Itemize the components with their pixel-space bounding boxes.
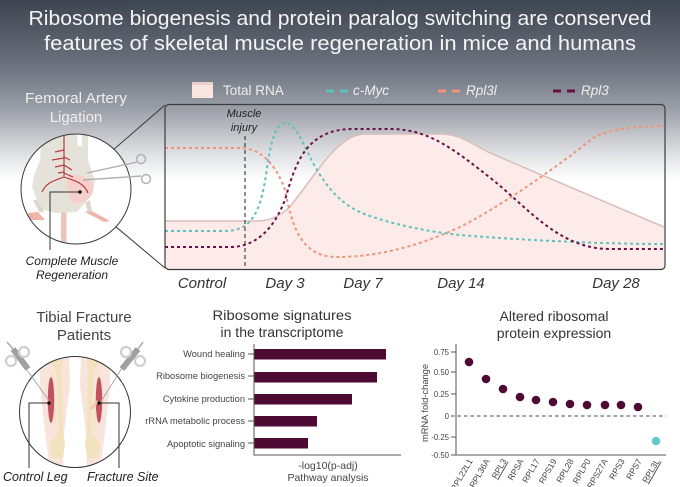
heading: tibial fracture patients [36,309,132,344]
y tick labels: 0.75 [434,348,450,357]
x tick labels: RPL3L [640,457,662,485]
fracture mark [91,401,98,409]
x tick labels: RPL17 [520,457,542,485]
feet [28,210,110,222]
x tick labels: RPSA [505,457,526,482]
title [28,8,652,55]
time axis labels: Day 3 [265,275,305,292]
pointer: complete muscle regeneration [50,190,82,250]
arteries [42,134,88,193]
pointer: fracture site [97,401,119,468]
marker: muscle injury line [244,136,246,269]
title: Ribosome biogenesis and protein paralog switching are conserved [28,8,652,30]
left leg [40,355,70,470]
line: Rpl3 [165,129,664,249]
bar axis title [287,460,369,484]
bar axis title: -log10(p-adj) [298,460,358,472]
heading: altered ribosomal protein expression [497,308,611,341]
legend: Rpl3: Rpl3 [581,83,609,98]
heading: tibial fracture patients: Patients [57,327,111,344]
x tick labels: RPL28 [554,457,576,485]
dot plot: mRNA fold-change [420,344,666,487]
icon: legs illustration [20,355,130,470]
title: features of skeletal muscle regeneration in mice and humans [44,33,636,55]
heading: femoral artery ligation: Ligation [50,109,102,126]
dot plot axes [451,344,666,455]
bar category labels: Ribosome biogenesis [156,371,245,381]
legend: Rpl3l [438,83,498,98]
x tick labels [448,457,662,487]
time axis labels: Day 7 [343,275,383,292]
tail [61,212,66,242]
x tick labels: RPL3 [489,457,509,480]
zero line [451,415,666,417]
legend: Rpl3l: Rpl3l [466,83,498,98]
line: total RNA top edge [165,134,664,227]
legend: Rpl3 [553,83,609,98]
area: total RNA [165,134,664,269]
y tick labels: 0 [445,412,450,421]
bar category labels: Wound healing [183,349,245,359]
heading: femoral artery ligation [25,90,128,126]
label: complete muscle regeneration: Complete Muscle [26,254,119,268]
y tick labels: 0.50 [434,368,450,377]
x tick labels: RPS3 [607,457,627,481]
muscle area [67,175,93,203]
legend: c-Myc: c-Myc [353,83,389,98]
bar category labels: Apoptotic signaling [167,439,245,449]
y tick labels: 0.25 [434,390,450,399]
y tick labels: -0.25 [431,433,450,442]
y axis title: mRNA fold-change [420,364,430,442]
label: muscle injury: injury [231,122,259,134]
heading: tibial fracture patients: Tibial Fracture [36,309,132,326]
time axis labels: Day 28 [592,275,640,292]
pointer: control leg [29,401,51,468]
labels: leg sites [3,470,159,484]
time axis labels: Day 14 [437,275,485,292]
connector lines to chart [90,105,165,268]
chart frame [165,104,665,270]
dot: RPL3L [652,437,660,445]
heading: femoral artery ligation: Femoral Artery [25,90,128,107]
icon: forceps [83,154,150,184]
x tick labels: RPS7 [624,457,644,481]
legend: total RNA [192,82,284,98]
label: complete muscle regeneration: Regeneration [36,268,108,282]
heading: altered ribosomal protein expression: protein expression [497,325,611,341]
time axis labels [178,275,640,292]
label: muscle injury: Muscle [227,108,261,120]
x tick labels: RPLP0 [571,457,593,485]
bar category labels: Cytokine production [163,394,245,404]
icon: right syringe [100,342,145,403]
bar axis title: Pathway analysis [287,472,369,484]
bar category labels: rRNA metabolic process [145,416,245,426]
right leg [80,355,110,470]
line: c-Myc [165,123,664,244]
x tick labels: RPS19 [537,457,559,485]
time axis labels: Control [178,275,227,292]
labels: leg sites: Control Leg [3,470,68,484]
icon: mouse hindlimb illustration [21,134,131,244]
line chart: regeneration time course [165,104,665,270]
y tick labels [431,348,450,460]
y tick labels: -0.50 [431,451,450,460]
dots: upregulated proteins [465,358,642,411]
icon: left syringe [6,342,50,402]
line: Rpl3l [165,126,664,257]
heading: ribosome signatures [212,307,352,340]
label: muscle injury [227,108,261,134]
bars [254,349,386,448]
bar axes [248,344,401,455]
legend: total RNA: Total RNA [223,83,284,98]
legend [192,82,609,98]
heading: altered ribosomal protein expression: Altered ribosomal [500,308,608,324]
label: complete muscle regeneration [26,254,119,282]
heading: ribosome signatures: Ribosome signatures [212,307,352,323]
bar category labels [145,349,245,449]
labels: leg sites: Fracture Site [87,470,159,484]
body [32,134,95,213]
bar chart: pathway analysis [145,344,401,484]
heading: ribosome signatures: in the transcriptome [221,324,344,340]
legend: c-Myc [326,83,389,98]
